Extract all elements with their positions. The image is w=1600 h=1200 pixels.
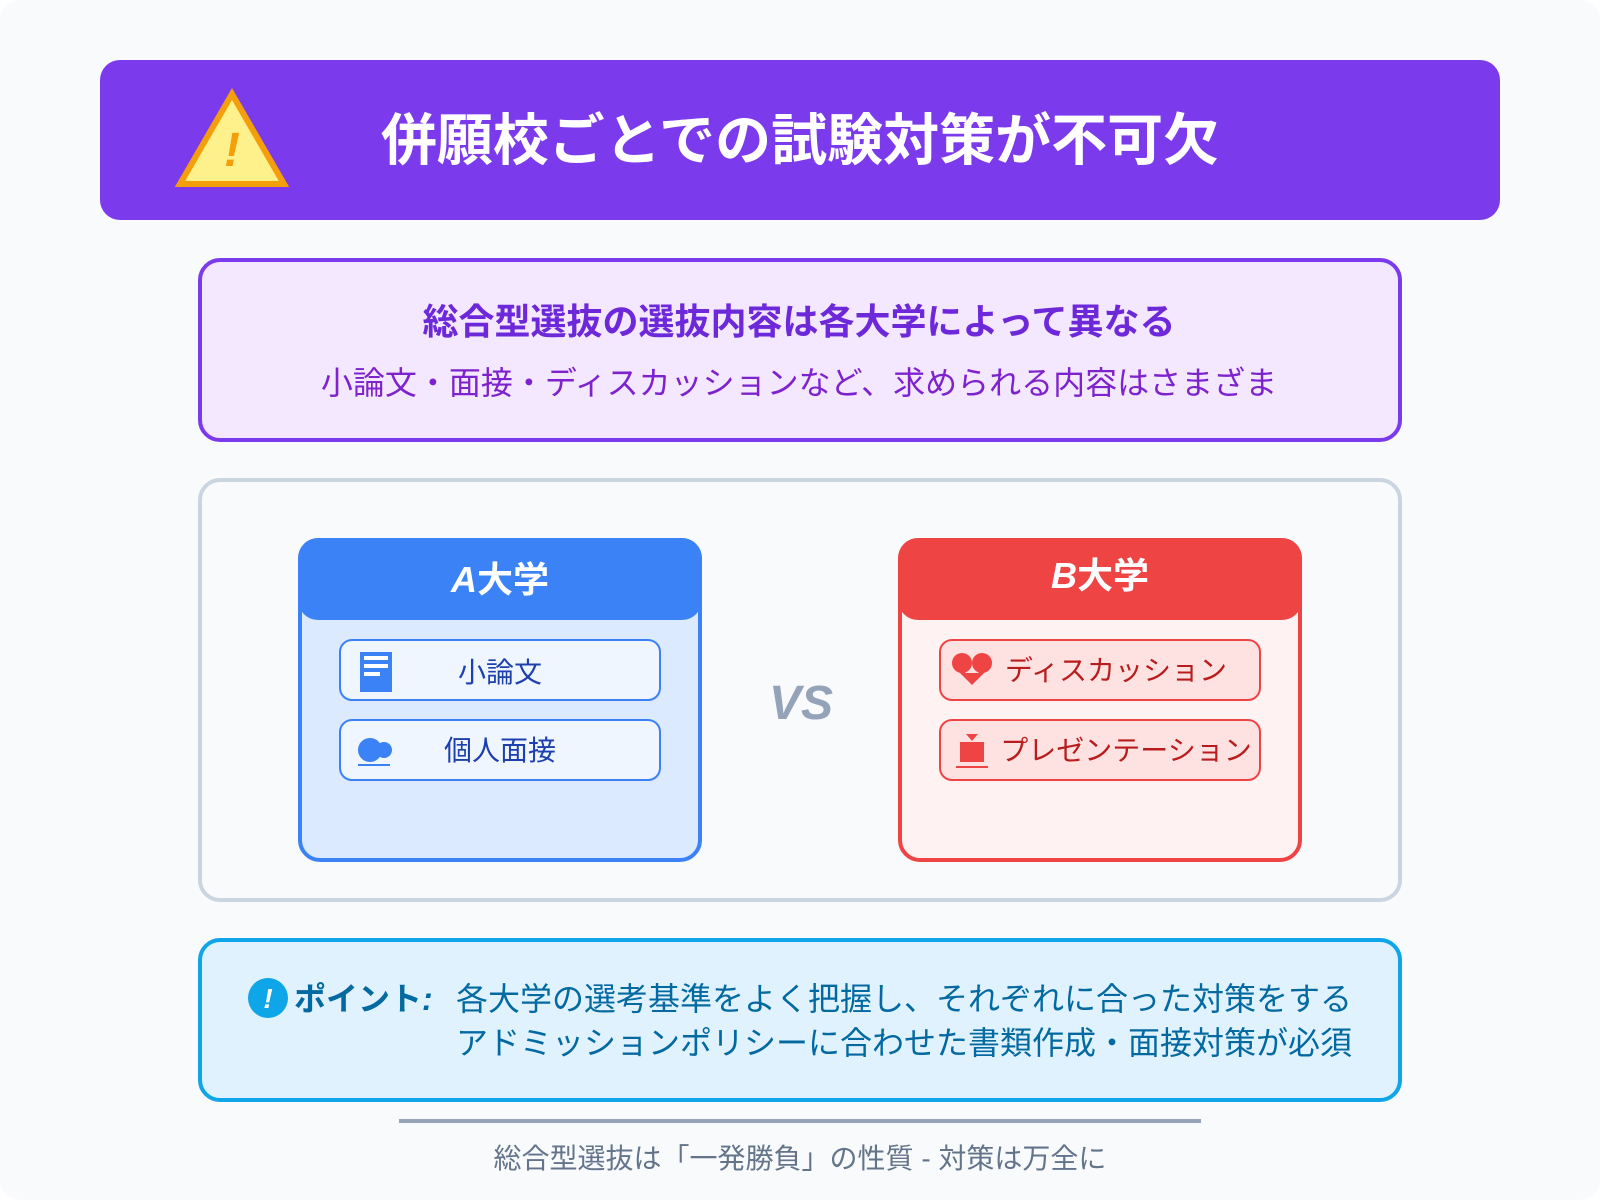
card: university B (898, 538, 1302, 860)
icon: presentation (956, 734, 988, 768)
panel: comparison (200, 480, 1400, 900)
point body: 各大学の選考基準をよく把握し、それぞれに合った対策をする (456, 981, 1352, 1017)
title: 併願校ごとでの試験対策が不可欠 (381, 109, 1219, 172)
icon: warning triangle (180, 94, 284, 184)
icon: exclamation (248, 978, 288, 1018)
item: essay (340, 640, 660, 700)
summary subtext: 小論文・面接・ディスカッションなど、求められる内容はさまざま (321, 365, 1277, 401)
icon: exclamation: ! (263, 983, 273, 1014)
item: essay: 小論文 (458, 657, 542, 688)
icon: warning triangle: ! (224, 124, 240, 177)
title banner (100, 60, 1500, 220)
card B header (898, 538, 1302, 620)
point body (456, 981, 1352, 1061)
label: VS: VS (769, 677, 833, 730)
card: university A (298, 538, 702, 860)
point label: ポイント: (294, 981, 433, 1017)
item: interview: 個人面接 (444, 735, 556, 766)
footer note: 総合型選抜は「一発勝負」の性質 - 対策は万全に (494, 1143, 1106, 1174)
item: presentation: プレゼンテーション (1000, 735, 1252, 766)
point body: アドミッションポリシーに合わせた書類作成・面接対策が必須 (456, 1025, 1352, 1061)
icon: heart (952, 653, 992, 685)
card A header (298, 538, 702, 620)
item: discussion (940, 640, 1260, 700)
summary heading: 総合型選抜の選抜内容は各大学によって異なる (422, 301, 1176, 342)
panel: summary (200, 260, 1400, 440)
item: interview (340, 720, 660, 780)
panel: key point (200, 940, 1400, 1100)
icon: document (360, 652, 392, 692)
card B heading: B大学 (1051, 555, 1149, 596)
icon: people (358, 738, 392, 766)
card A heading: A大学 (450, 559, 549, 600)
item: discussion: ディスカッション (1005, 655, 1227, 686)
item: presentation (940, 720, 1260, 780)
